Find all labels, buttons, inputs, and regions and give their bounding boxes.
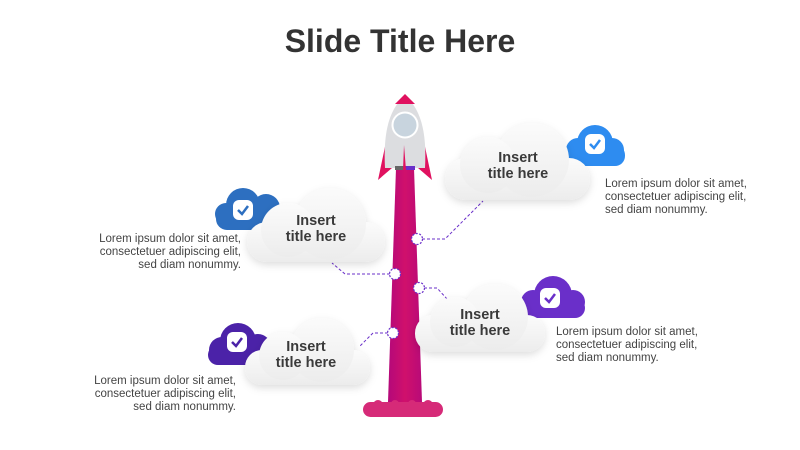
item 2: left middle: Lorem ipsum dolor sit amet,	[99, 233, 241, 245]
body text: sed diam nonummy.	[605, 204, 708, 216]
item 2: left middle: Insert	[296, 213, 336, 229]
item 2: left middle	[99, 188, 385, 271]
body text: consectetuer adipiscing elit,	[605, 191, 746, 203]
item 4: left lower: title here	[276, 355, 336, 371]
item 3: right lower: title here	[450, 323, 510, 339]
title: Slide Title Here	[285, 23, 515, 59]
item 4: left lower: consectetuer adipiscing elit,	[95, 388, 236, 400]
item 4: left lower: Insert	[286, 339, 326, 355]
item 1: top right	[445, 123, 747, 216]
item 2: left middle: title here	[286, 229, 346, 245]
item 3: right lower: consectetuer adipiscing elit,	[556, 339, 697, 351]
item 4: left lower: Lorem ipsum dolor sit amet,	[94, 375, 236, 387]
body text: Lorem ipsum dolor sit amet,	[605, 178, 747, 190]
item 3: right lower	[415, 276, 698, 364]
item 3: right lower: Insert	[460, 307, 500, 323]
item 2: left middle: consectetuer adipiscing elit,	[100, 246, 241, 258]
cloud: heading	[445, 123, 590, 200]
rocket	[378, 94, 432, 180]
connector dots	[388, 234, 424, 338]
rocket trail	[388, 168, 422, 402]
item 1: top right: Insert	[498, 150, 538, 166]
item 3: right lower: sed diam nonummy.	[556, 352, 659, 364]
smoke base	[363, 400, 443, 417]
item 4: left lower: sed diam nonummy.	[133, 401, 236, 413]
item 1: top right: title here	[488, 166, 548, 182]
item 3: right lower: Lorem ipsum dolor sit amet,	[556, 326, 698, 338]
connectors	[332, 201, 483, 346]
item 4: left lower	[94, 318, 370, 413]
item 2: left middle: sed diam nonummy.	[138, 259, 241, 271]
icon cloud blue	[565, 125, 625, 166]
